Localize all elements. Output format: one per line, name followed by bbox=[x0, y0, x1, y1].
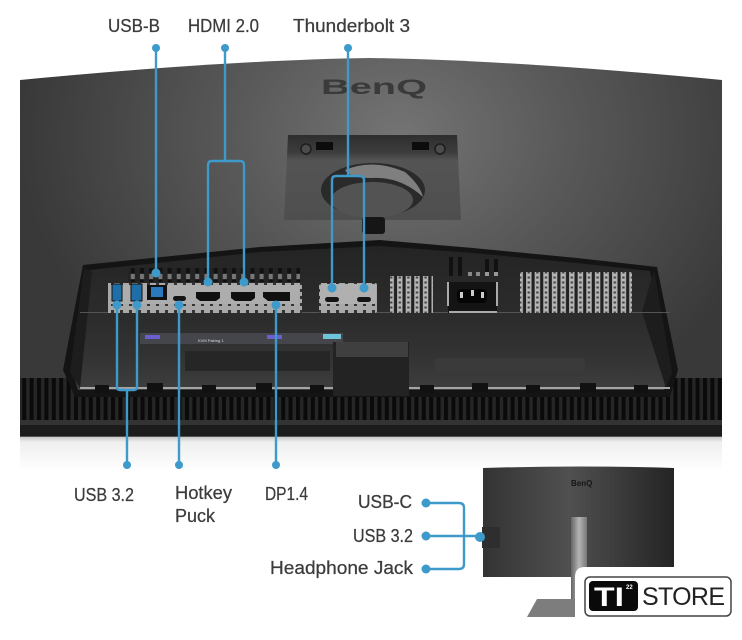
stand base bbox=[527, 599, 590, 617]
stand peg bbox=[362, 217, 385, 234]
label: DP1.4: DP1.4 bbox=[265, 484, 308, 504]
callout: Thunderbolt 3 bbox=[328, 44, 368, 292]
label: Hotkey Puck: Puck bbox=[175, 506, 216, 526]
callout: USB-B bbox=[152, 44, 160, 278]
port plate Thunderbolt bbox=[319, 283, 377, 313]
store logo: TI bbox=[594, 582, 624, 612]
USB-A ports bbox=[112, 284, 122, 301]
store logo bbox=[575, 567, 742, 640]
USB-B port bbox=[147, 285, 167, 300]
vent group right bbox=[520, 272, 632, 313]
top slot row bbox=[128, 268, 300, 282]
callout: Hotkey Puck bbox=[174, 300, 184, 469]
side port callouts bbox=[422, 498, 485, 574]
store logo: STORE bbox=[642, 583, 725, 611]
label: Thunderbolt 3: Thunderbolt 3 bbox=[293, 16, 410, 36]
stand hole bbox=[321, 163, 425, 218]
callout: DP1.4 bbox=[272, 300, 280, 469]
port cavity bbox=[63, 240, 678, 397]
floor shadow bbox=[20, 437, 722, 471]
label: Hotkey Puck: Hotkey bbox=[175, 483, 232, 503]
vent group middle bbox=[390, 276, 433, 313]
DisplayPort bbox=[263, 292, 290, 301]
label: Hotkey Puck bbox=[175, 483, 232, 526]
label: USB 3.2: USB 3.2 bbox=[74, 485, 134, 505]
stand pole bbox=[571, 517, 587, 601]
bottom vent strip bbox=[20, 378, 722, 437]
callout: HDMI 2.0 bbox=[204, 44, 248, 286]
VESA mount recess bbox=[284, 135, 461, 220]
store logo: 22 bbox=[626, 585, 633, 591]
small monitor bbox=[482, 466, 674, 617]
centre stand block bbox=[333, 342, 409, 396]
KVM label strip bbox=[140, 333, 343, 344]
mini BenQ logo: BenQ bbox=[571, 479, 592, 488]
BenQ logo: BenQ bbox=[321, 76, 427, 99]
label: USB 3.2 side: USB 3.2 bbox=[353, 526, 413, 546]
label: USB-B: USB-B bbox=[108, 16, 160, 36]
side port block bbox=[482, 527, 500, 548]
HDMI ports bbox=[196, 292, 220, 301]
hotkey port bbox=[173, 296, 186, 301]
KVM label strip: KVM Pairing 1 bbox=[198, 338, 224, 343]
label: HDMI 2.0: HDMI 2.0 bbox=[188, 16, 259, 36]
port plate left bbox=[108, 283, 302, 313]
power socket bbox=[447, 257, 498, 313]
label: Headphone Jack: Headphone Jack bbox=[270, 558, 414, 578]
monitor back panel bbox=[20, 58, 722, 437]
callout: USB 3.2 bbox=[112, 300, 142, 469]
label: USB-C: USB-C bbox=[358, 492, 412, 512]
